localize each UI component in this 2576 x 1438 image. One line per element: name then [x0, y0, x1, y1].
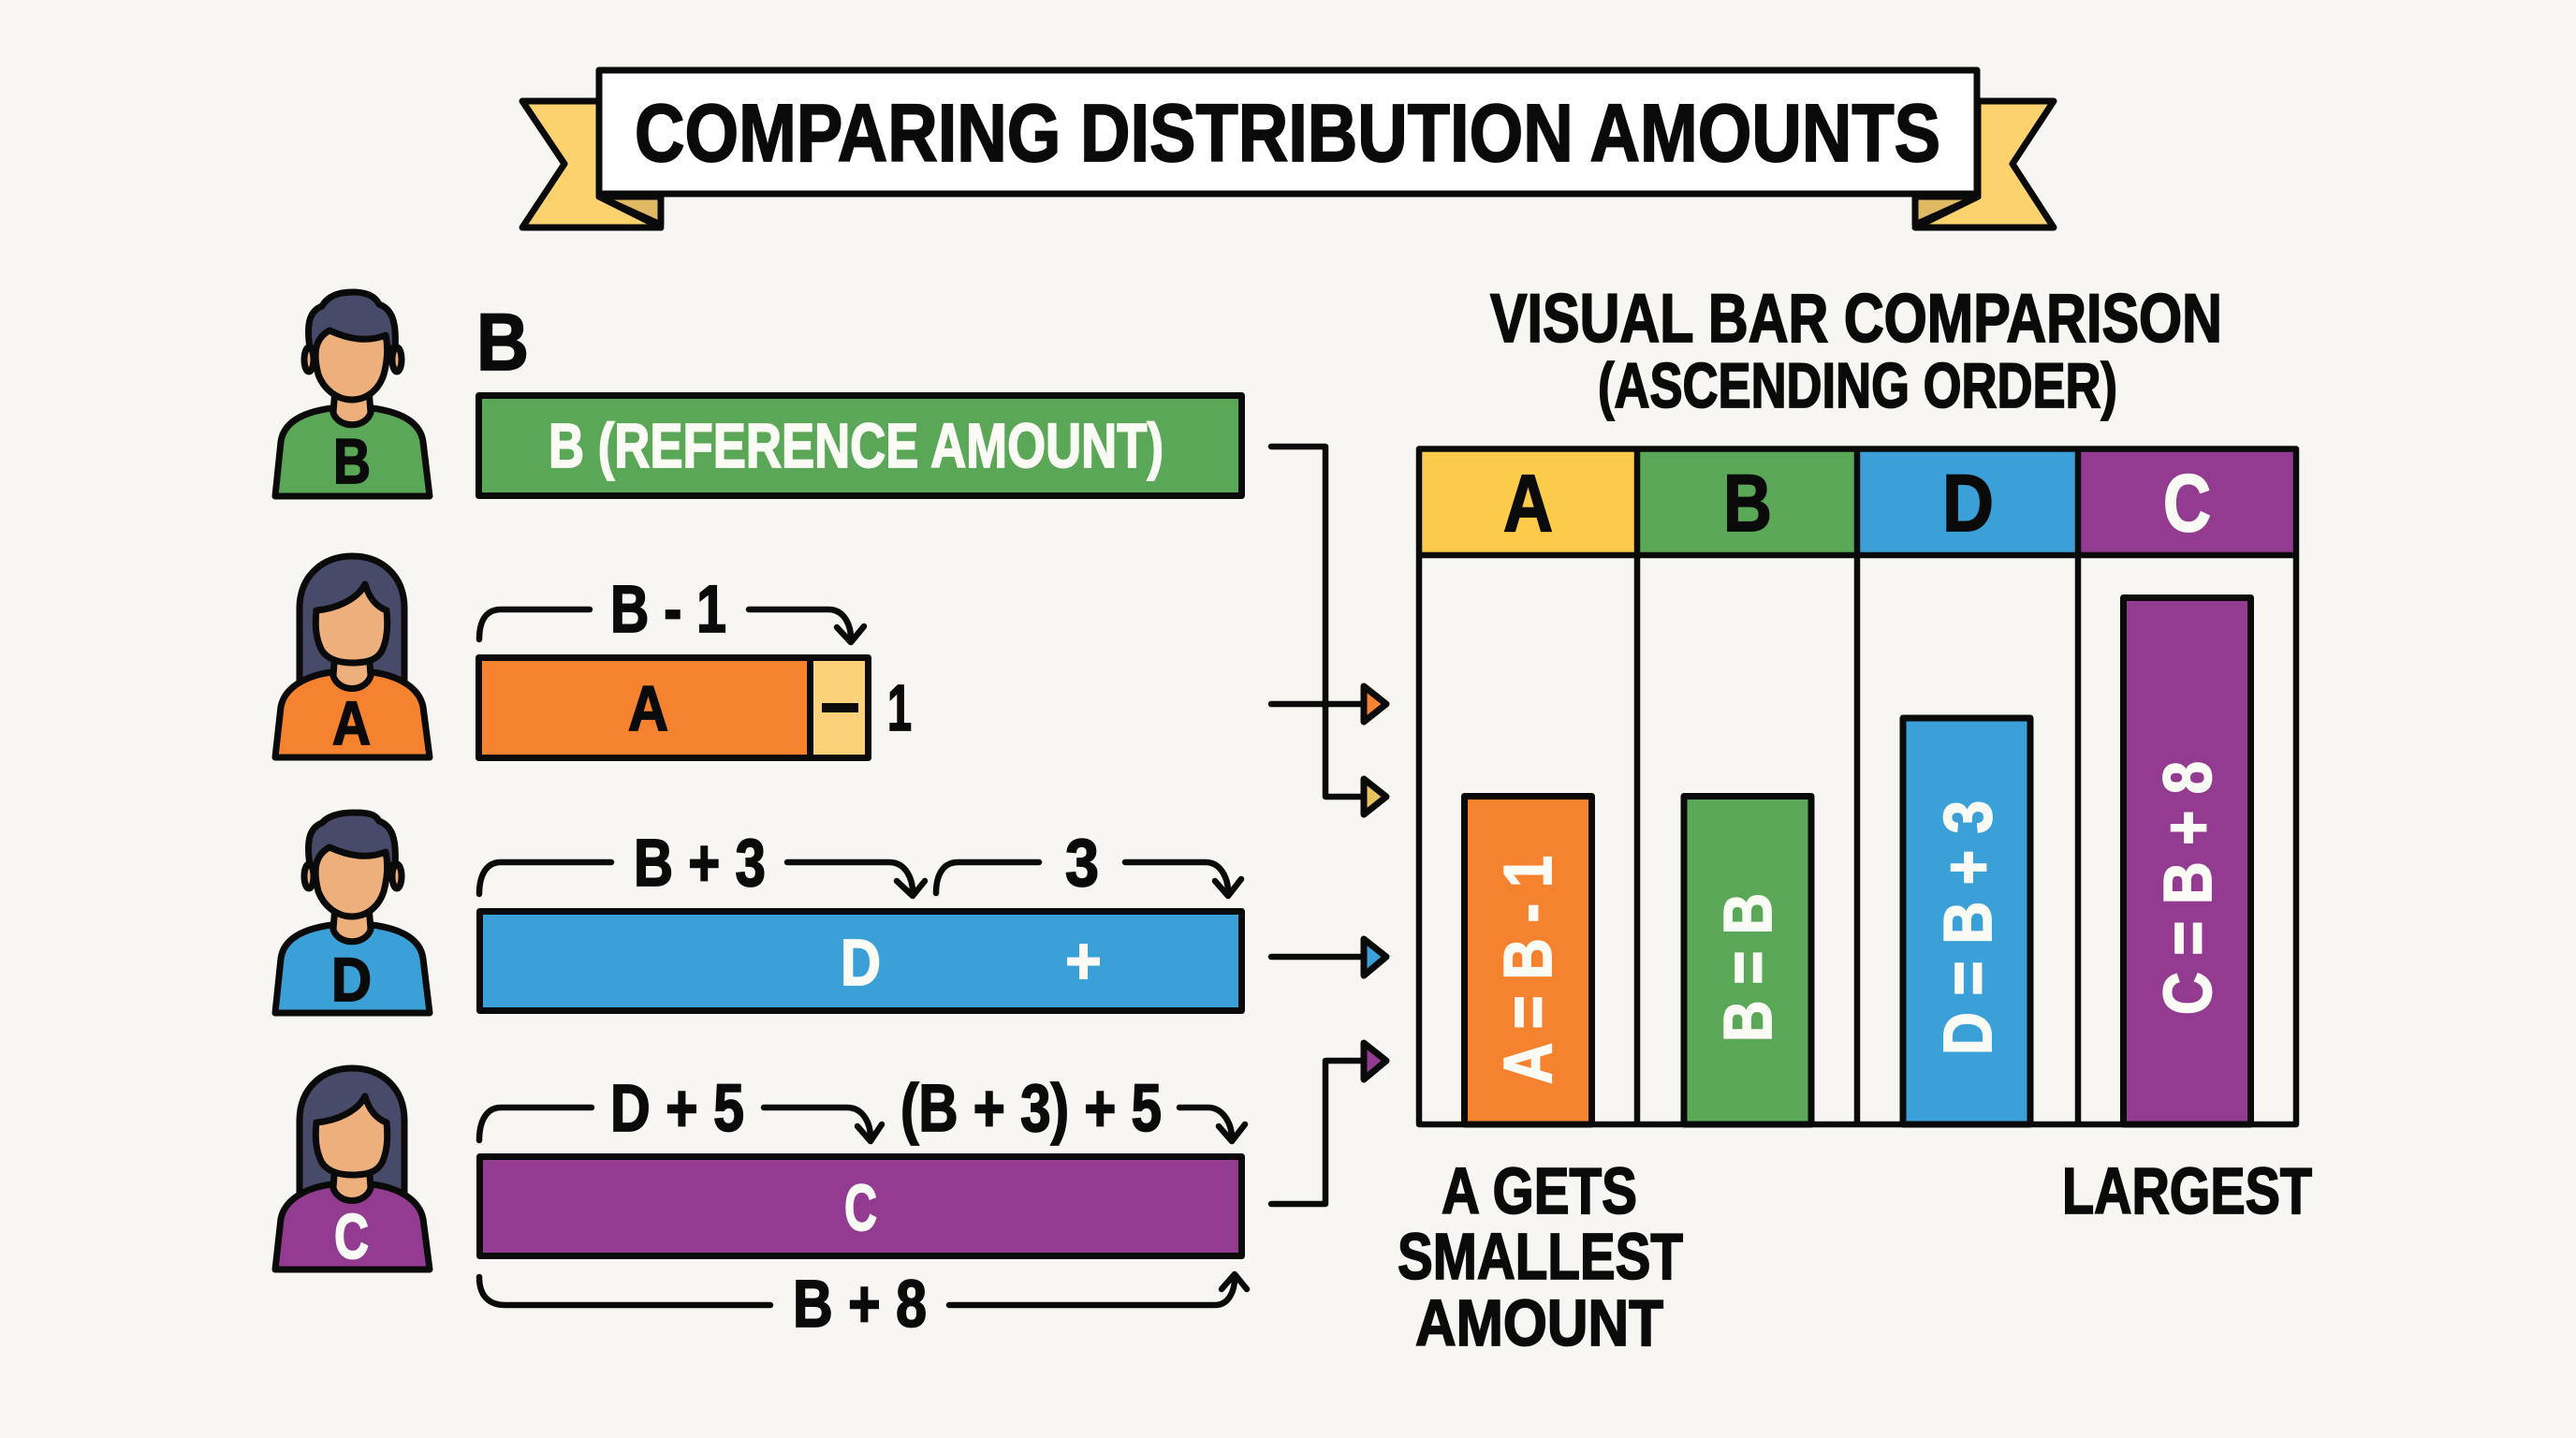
icon: person C	[275, 1068, 430, 1272]
bracket: B - 1: B - 1	[610, 573, 726, 647]
bar: B reference amount	[479, 395, 1241, 496]
heading line 1: VISUAL BAR COMPARISON	[1490, 281, 2222, 357]
chart header cells: B	[1723, 459, 1772, 549]
bar: A with minus segment: A	[628, 673, 668, 744]
icon: person A	[275, 556, 430, 757]
bracket: (B + 3) + 5: (B + 3) + 5	[900, 1072, 1162, 1146]
title text: COMPARING DISTRIBUTION AMOUNTS	[635, 88, 1940, 179]
bar: D = B + 3: D = B + 3	[1931, 800, 2006, 1055]
chart header cells: A	[1503, 459, 1553, 549]
caption: A gets smallest amount: SMALLEST	[1398, 1220, 1683, 1293]
icon: person B	[275, 292, 430, 497]
bracket: B + 3	[479, 827, 925, 901]
ribbon: right tail	[1915, 101, 2054, 227]
title plate	[599, 70, 1977, 194]
title banner	[522, 70, 2054, 227]
bar: B = B	[1684, 796, 1811, 1124]
bar: C = B + 8	[2123, 597, 2250, 1124]
bar: C: C	[844, 1171, 877, 1244]
heading line 2: (ASCENDING ORDER)	[1598, 350, 2117, 421]
bracket: B + 8: B + 8	[793, 1268, 927, 1342]
shirt letter A: A	[332, 688, 371, 757]
arrow: D to chart	[1271, 939, 1386, 976]
arrow: B to chart	[1271, 447, 1386, 814]
shirt letter B: B	[333, 426, 371, 497]
row: person D with B + 3 bar	[275, 813, 1241, 1014]
shirt letter C: C	[334, 1201, 369, 1272]
bracket: B + 3: B + 3	[634, 827, 766, 901]
arrow: A to chart	[1271, 686, 1386, 722]
label B: B	[476, 298, 529, 388]
bar: D: D	[841, 926, 881, 999]
arrow: C to chart	[1271, 1043, 1386, 1204]
chart header cells: D	[1942, 459, 1994, 549]
caption: A gets smallest amount: AMOUNT	[1415, 1286, 1663, 1359]
bar: B = B: B = B	[1711, 893, 1786, 1042]
bar: D	[479, 912, 1241, 1011]
shirt letter D: D	[331, 945, 372, 1014]
connector arrows to chart	[1271, 447, 1386, 1204]
ribbon: left tail	[522, 101, 661, 227]
chart heading	[1490, 281, 2222, 421]
bracket: B + 8	[479, 1268, 1247, 1342]
bar: A with minus segment	[479, 657, 869, 758]
bar: C = B + 8: C = B + 8	[2151, 761, 2226, 1015]
caption: A gets smallest amount: A GETS	[1442, 1154, 1637, 1227]
bracket: D + 5	[479, 1072, 882, 1146]
row: person C with D + 5 bar	[275, 1068, 1247, 1342]
caption: A gets smallest amount	[1398, 1154, 1683, 1359]
bar: C	[479, 1157, 1241, 1256]
bar: A = B - 1	[1464, 796, 1591, 1124]
bracket: 3: 3	[1065, 827, 1099, 901]
caption: largest: LARGEST	[2062, 1154, 2312, 1227]
row: person A with B - 1 bar	[275, 556, 912, 758]
bracket: B - 1	[479, 573, 864, 647]
bar: D = B + 3	[1903, 718, 2030, 1124]
bracket: 3	[936, 827, 1241, 901]
bar: B reference amount: B (REFERENCE AMOUNT)	[549, 411, 1164, 481]
chart header cells: C	[2163, 459, 2211, 549]
bar: A = B - 1: A = B - 1	[1491, 856, 1566, 1084]
chart grid	[1419, 448, 2296, 1124]
chart header cells	[1419, 449, 2296, 555]
icon: person D	[275, 813, 430, 1014]
bracket: D + 5: D + 5	[610, 1072, 744, 1146]
bar chart: ascending order	[1419, 448, 2296, 1124]
label: 1: 1	[887, 671, 912, 744]
row: person B with reference bar	[275, 292, 1241, 497]
